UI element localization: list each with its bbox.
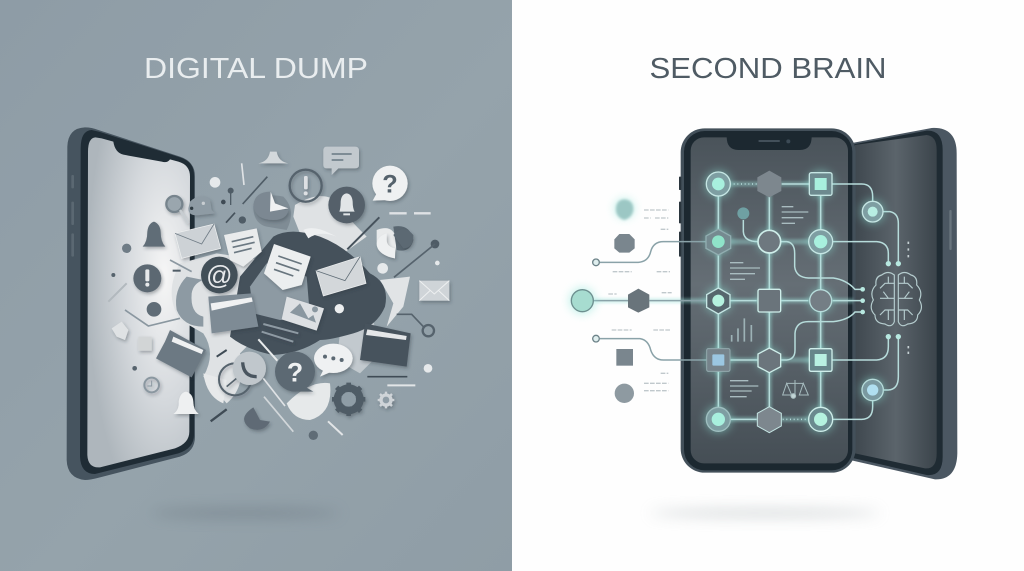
glow under connections	[594, 184, 853, 419]
connections	[593, 184, 898, 419]
ground shadow: left phone	[150, 509, 340, 517]
icon: bell light	[173, 392, 199, 414]
debris: icons	[112, 147, 449, 430]
node ring r2	[758, 230, 781, 253]
icon: clock	[144, 378, 159, 392]
icon: envelope 3	[419, 281, 449, 301]
node circle r3	[810, 290, 832, 312]
left phone	[67, 127, 195, 480]
icon: at sign: @	[206, 260, 233, 290]
icon: top triangle	[258, 152, 288, 163]
node side bottom	[862, 379, 883, 401]
icon: ghost chat	[188, 196, 215, 215]
icon: question bubble	[372, 166, 408, 201]
title: second brain: SECOND BRAIN	[650, 53, 886, 85]
back phone	[850, 128, 957, 479]
text lines on screen	[730, 207, 808, 397]
icon: question bubble: ?	[382, 171, 398, 199]
ground shadow: right phone	[650, 509, 880, 517]
icon: alert disk	[133, 264, 161, 292]
icon: gear small	[378, 392, 394, 408]
node hex r3	[707, 288, 730, 314]
icon: folder 2	[156, 330, 206, 377]
icon: doc 1	[224, 228, 262, 267]
icon: brain	[871, 272, 921, 326]
node hex r4	[758, 348, 781, 373]
node hex r1	[757, 171, 781, 197]
node r1	[706, 172, 730, 196]
node r5 right	[809, 407, 833, 431]
icon: pie chart	[253, 192, 288, 220]
icon: envelope 2	[316, 257, 366, 296]
icon: alert ring	[290, 170, 322, 202]
network nodes	[571, 171, 908, 433]
icon: dots bubble	[314, 344, 353, 377]
front phone	[679, 128, 856, 473]
illustration: digital dump	[67, 127, 449, 480]
icon: envelope 1	[175, 224, 221, 258]
node square r4 left	[707, 349, 730, 371]
node r5 left	[706, 407, 730, 431]
debris: circles and lines	[108, 163, 440, 440]
side labels: left	[608, 210, 672, 391]
title: digital dump: DIGITAL DUMP	[144, 53, 368, 85]
node r2 right	[809, 230, 833, 254]
left panel background	[0, 0, 512, 571]
mini bar chart	[732, 318, 751, 342]
icon: clock ring	[219, 363, 251, 395]
icon: chat note	[323, 147, 359, 175]
icon: folder 1	[208, 293, 258, 333]
icon: bell disk	[328, 187, 365, 223]
small scale icon	[783, 380, 808, 398]
outside nodes	[571, 199, 908, 403]
small node	[737, 207, 749, 219]
icon: magnifier	[166, 196, 188, 223]
icon: partial pie	[244, 407, 270, 430]
icon: phone disk	[233, 352, 266, 385]
icon: question disk: ?	[287, 358, 303, 388]
icon: question disk	[275, 352, 315, 392]
icon: bell on screen	[143, 222, 165, 247]
icon: dark doc lines	[262, 324, 298, 342]
icon: doc 2	[264, 244, 311, 290]
node hex r2	[706, 229, 731, 255]
icon: at sign	[201, 257, 238, 293]
node hex r5	[757, 407, 781, 433]
illustration: second brain	[570, 128, 957, 479]
right panel background	[512, 0, 1024, 571]
icon: picture	[282, 297, 324, 331]
node square r4 right	[809, 349, 832, 371]
icon: dark bits	[377, 229, 413, 258]
node glows	[570, 171, 884, 432]
icon: gear large	[332, 383, 365, 416]
node square r1	[809, 173, 832, 195]
icon: folder 3	[360, 323, 411, 367]
debris: background blobs	[172, 195, 413, 420]
icon: cube shapes	[112, 322, 152, 351]
node side top	[862, 201, 883, 222]
node square r3	[758, 289, 781, 312]
